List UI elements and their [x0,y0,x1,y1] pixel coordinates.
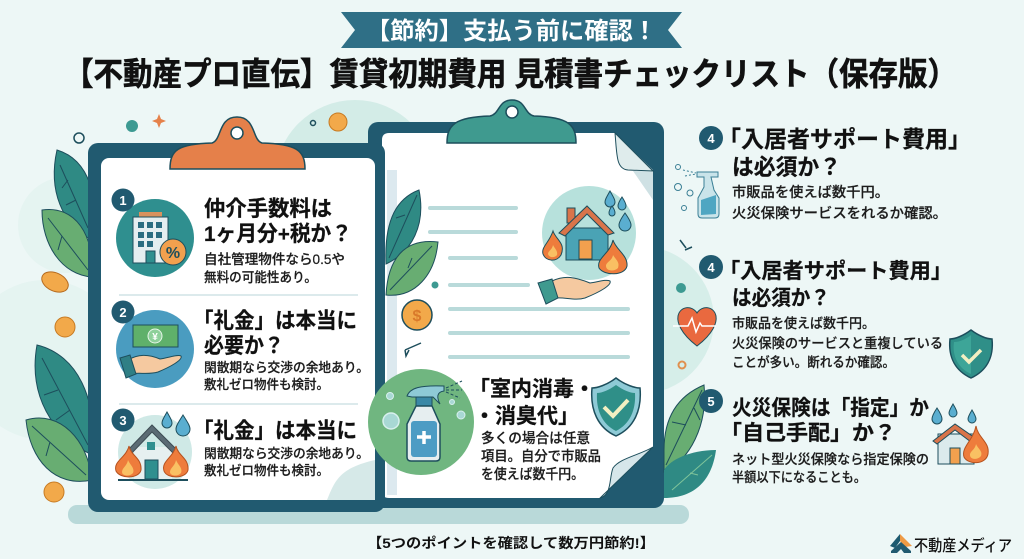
text: room disinfection: ・消臭代」 [474,405,579,428]
item 3 [112,408,369,489]
panel: left clipboard [88,117,385,512]
banner: 【節約】支払う前に確認！ [366,18,657,45]
right column item: fire insurance [699,389,929,485]
item 2: 必要か？ [204,334,284,358]
clip: orange [170,117,305,169]
icon: building with percent [116,199,194,277]
item 1: 仲介手数料は [204,197,332,221]
icon: house with fire small [932,404,988,464]
icon: banknote and hand: ¥ [152,332,158,343]
right column item: support fee B [699,255,952,370]
leaves on paper: $ [413,308,422,325]
item 2: 閑散期なら交渉の余地あり。 [204,360,369,375]
badge 1: 1 [119,193,127,208]
badge 1 [112,188,134,212]
right column item: support fee A [699,126,971,221]
icon: building with percent: % [166,245,180,262]
item 1: 自社管理物件なら0.5や [204,251,345,267]
right column item: support fee B: 「入居者サポート費用」 [719,260,952,283]
right column item: support fee B: は必須か？ [732,287,830,310]
right column item: support fee B: 市販品を使えば数千円。 [732,315,875,331]
icon: spray bottle circle [368,369,474,475]
left leaves and coins [26,113,347,502]
leaves on paper [386,190,438,356]
clip: teal [447,100,576,143]
right column item: fire insurance: 5 [707,394,715,409]
right column item: fire insurance: 半額以下になることも。 [732,469,866,485]
icon: spray bottle small [674,164,719,218]
text: room disinfection: を使えば数千円。 [481,466,584,482]
right column item: support fee A: 火災保険サービスをれるか確認。 [732,205,947,221]
item 2: 敷礼ゼロ物件も検討。 [204,377,329,392]
icon: house with fire and hand [538,186,636,304]
item 2: 「礼金」は本当に [193,309,357,333]
right column item: support fee A: 市販品を使えば数千円。 [732,184,889,200]
item 1: 1ヶ月分+税か？ [204,222,352,246]
text: room disinfection [469,378,601,482]
icon: house with fire and drops [116,412,192,489]
icon: banknote and hand [116,310,194,388]
item 1 [112,188,352,285]
item 3: 閑散期なら交渉の余地あり。 [204,446,369,461]
logo: 不動産メディア [914,536,1012,555]
badge 3: 3 [119,413,127,428]
document lines [428,206,630,359]
banner [341,12,682,48]
icon: heart [673,308,716,346]
badge 3 [112,408,134,432]
panel: right clipboard [368,100,664,508]
right column item: support fee A: 「入居者サポート費用」 [718,126,971,152]
right column item: support fee B: ことが多い。断れるか確認。 [732,354,895,370]
badge 2: 2 [119,305,127,320]
right column item: support fee A: 4 [707,131,715,146]
right column item: fire insurance: ネット型火災保険なら指定保険の [732,452,929,467]
item 2 [112,300,369,392]
right column item: support fee B: 4 [707,260,715,275]
icon: shield small [950,330,992,378]
right column item: support fee A: は必須か？ [732,155,841,180]
right column item: fire insurance: 「自己手配」か？ [720,422,896,445]
folded corners [600,133,653,498]
icon: shield [592,378,640,436]
item 3: 「礼金」は本当に [193,419,357,443]
right column item: support fee B: 火災保険のサービスと重複している [732,335,943,351]
item 3: 敷礼ゼロ物件も検討。 [204,463,329,478]
item 1: 無料の可能性あり。 [204,270,317,285]
right column item: fire insurance: 火災保険は「指定」か [732,397,929,420]
text: room disinfection: 項目。自分で市販品 [481,448,601,464]
fold: bottom right [327,460,375,500]
footer note: 【5つのポイントを確認して数万円節約!】 [367,535,655,551]
bottom right leaves [664,385,716,498]
title: 【不動産プロ直伝】賃貸初期費用 見積書チェックリスト（保存版） [64,56,957,92]
text: room disinfection: 多くの場合は任意 [481,430,590,446]
badge 2 [112,300,134,324]
text: room disinfection: 「室内消毒・ [469,378,595,401]
logo [890,534,1012,555]
